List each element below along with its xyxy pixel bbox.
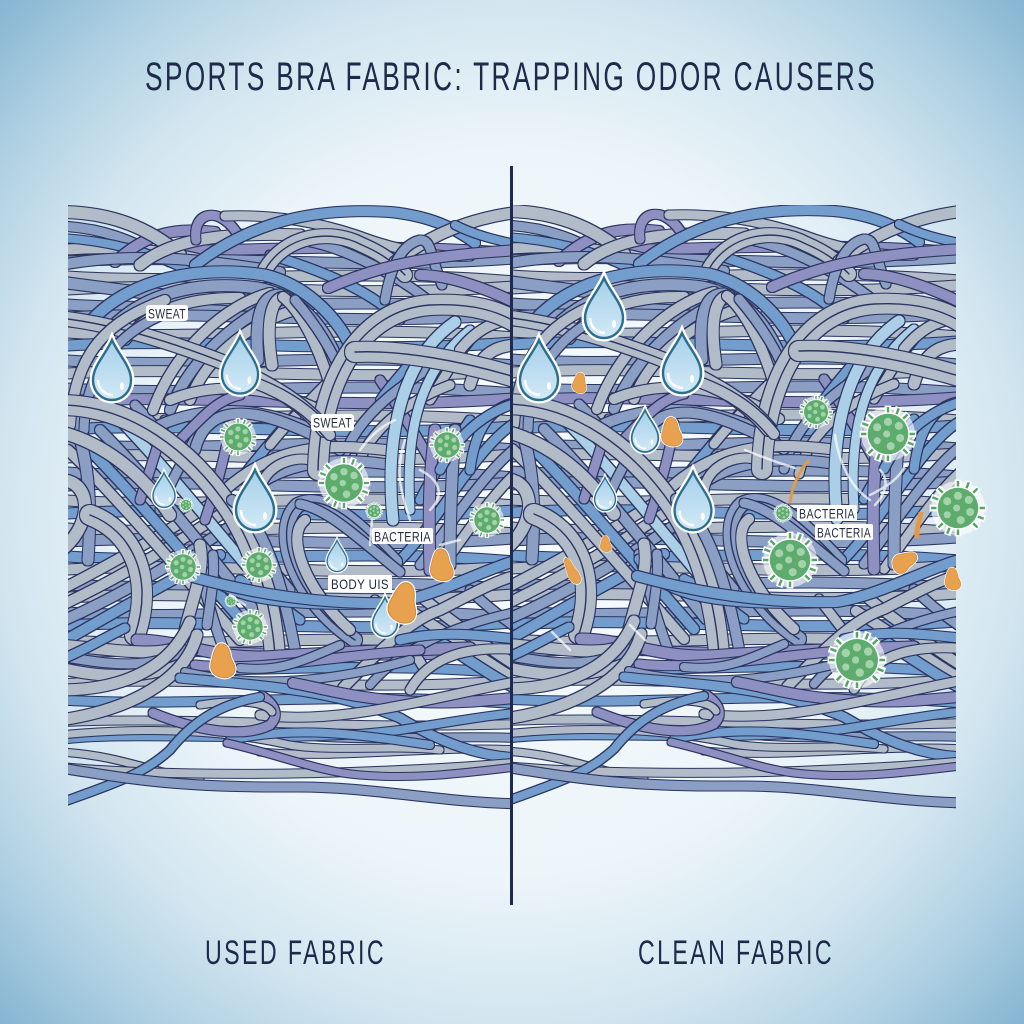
icon: small bacteria [225,595,237,607]
icon: bacteria [429,427,465,463]
icon: sweat drop [236,470,274,530]
caption: used fabric: USED FABRIC [205,934,386,972]
icon: sweat drop [632,410,658,452]
icon: sweat drop [520,340,558,400]
icon: body oil blob [662,417,682,446]
label: bacteria: BACTERIA [374,528,431,544]
wisps: clean fabric [552,435,905,650]
icon: sweat drop [373,598,397,636]
icon: bacteria [219,418,257,456]
icon: bacteria [930,480,986,536]
icon: sweat drop [595,478,615,510]
icon: body oil streak [790,460,809,503]
icon: small bacteria [179,498,193,512]
icon: body oil blob [600,536,612,552]
icon: body oil blob [945,568,961,590]
icon: small bacteria [774,504,792,522]
icon: bacteria [469,502,505,538]
label: bacteria: BACTERIA [799,506,855,522]
divider line [510,166,513,905]
icon: bacteria [799,395,833,429]
icon: bacteria [828,631,886,689]
icon: sweat drop [663,333,701,393]
caption: clean fabric: CLEAN FABRIC [638,934,834,972]
icon: body oil blob [385,580,423,626]
icon: sweat drop [153,473,175,507]
label: sweat: SWEAT [148,306,186,322]
icon: body oil blob [561,556,583,586]
icon: sweat drop [327,540,347,572]
icon: body oil blob [571,372,589,394]
icon: bacteria [165,549,201,585]
icon: body oil blob [211,644,235,678]
icon: body oil blob [889,548,921,576]
icon: bacteria [318,457,370,509]
wisps: used fabric [230,420,460,605]
fiber mesh: used fabric [60,211,525,804]
icon: body oil streak [917,512,921,538]
icon: sweat drop [675,472,711,530]
icon: bacteria [762,532,818,588]
icon: small bacteria [365,502,383,520]
panel: used fabric [60,211,525,804]
panel: clean fabric [504,210,986,803]
icon: bacteria [241,547,277,583]
icon: sweat drop [585,278,623,338]
icon: body oil blob [430,549,453,581]
fiber mesh: clean fabric [504,210,969,803]
label: body oils: BODY UIS [331,576,389,592]
label: sweat: SWEAT [313,414,352,430]
icon: bacteria [232,609,268,645]
icon: sweat drop [222,336,258,394]
icon: sweat drop [93,340,131,400]
label: bacteria: BACTERIA [817,524,871,540]
icon: bacteria [860,406,916,462]
